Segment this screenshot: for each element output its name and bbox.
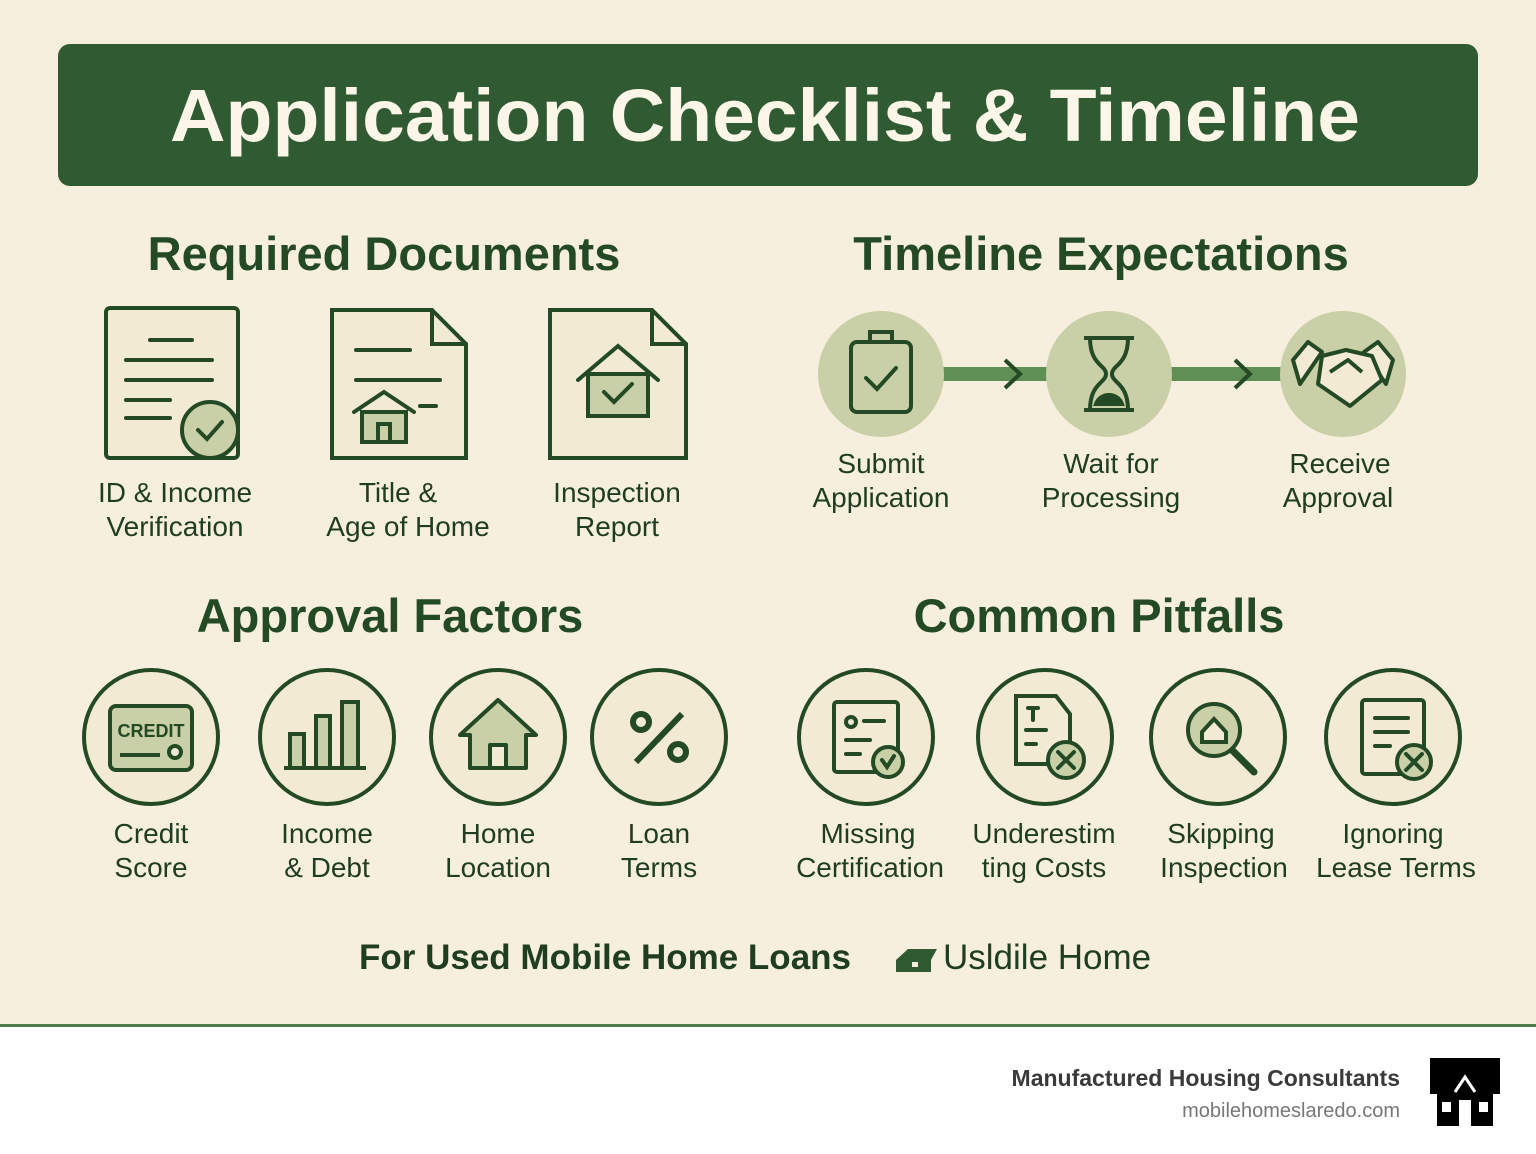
icon: certification bbox=[834, 702, 903, 777]
labels: timeline bbox=[813, 448, 1393, 513]
labels: timeline: Application bbox=[813, 482, 949, 513]
text: Credit bbox=[114, 818, 189, 849]
icon: credit bbox=[110, 706, 192, 770]
text: Lease Terms bbox=[1316, 852, 1476, 883]
labels: timeline: Submit bbox=[837, 448, 925, 479]
icon: percent bbox=[633, 714, 686, 762]
icon: lease bbox=[1362, 700, 1431, 779]
labels: documents: ID & Income bbox=[98, 477, 252, 508]
labels: timeline: Approval bbox=[1283, 482, 1393, 513]
icon: credit: CREDIT bbox=[118, 721, 185, 741]
text: usldile home: Usldile Home bbox=[943, 938, 1151, 977]
labels: timeline: Processing bbox=[1042, 482, 1180, 513]
title banner bbox=[58, 44, 1478, 186]
heading: Approval Factors: Approval Factors bbox=[197, 589, 583, 642]
footer: company: Manufactured Housing Consultants bbox=[1012, 1065, 1400, 1091]
text: & Debt bbox=[284, 852, 370, 883]
labels: documents: Verification bbox=[107, 511, 243, 542]
title banner: Application Checklist & Timeline bbox=[170, 74, 1360, 157]
text: Missing bbox=[821, 818, 915, 849]
text: for used mobile home loans: For Used Mobile Home Loans bbox=[359, 938, 851, 977]
panel: required documents bbox=[106, 308, 686, 458]
text: Income bbox=[281, 818, 373, 849]
labels: documents: Title & bbox=[359, 477, 437, 508]
icon: hourglass bbox=[1046, 311, 1172, 437]
text: Score bbox=[114, 852, 188, 883]
text: ting Costs bbox=[982, 852, 1106, 883]
icon: handshake bbox=[1280, 311, 1406, 437]
icon: bar chart bbox=[284, 702, 366, 768]
panel: pitfalls bbox=[799, 670, 1460, 804]
icon: inspection report bbox=[550, 310, 686, 458]
icon: id document bbox=[106, 308, 238, 458]
labels: documents: Inspection bbox=[553, 477, 681, 508]
text: Home bbox=[461, 818, 535, 849]
text: Certification bbox=[796, 852, 944, 883]
icon: small house bbox=[896, 949, 937, 972]
icon: clipboard bbox=[818, 311, 944, 437]
text: Loan bbox=[628, 818, 690, 849]
footer: company bbox=[1012, 1065, 1400, 1122]
footer: company: mobilehomeslaredo.com bbox=[1182, 1100, 1400, 1122]
text: Underestim bbox=[972, 818, 1116, 849]
text: Terms bbox=[621, 852, 697, 883]
text: Location bbox=[445, 852, 551, 883]
text: Ignoring bbox=[1342, 818, 1444, 849]
arrow: connectors bbox=[940, 360, 1283, 388]
icon: costs document bbox=[1016, 696, 1084, 778]
footer divider bbox=[0, 1024, 1536, 1027]
heading: Required Documents: Required Documents bbox=[148, 227, 620, 280]
heading: Common Pitfalls: Common Pitfalls bbox=[914, 589, 1284, 642]
labels: timeline: Receive bbox=[1289, 448, 1391, 479]
text: Inspection bbox=[1160, 852, 1288, 883]
text: Skipping bbox=[1167, 818, 1275, 849]
labels: documents bbox=[98, 477, 681, 542]
heading: Timeline Expectations: Timeline Expectations bbox=[853, 227, 1349, 280]
labels: documents: Age of Home bbox=[326, 511, 490, 542]
labels: timeline: Wait for bbox=[1063, 448, 1159, 479]
timeline bbox=[813, 311, 1406, 513]
labels: documents: Report bbox=[575, 511, 659, 542]
panel: approval factors bbox=[84, 670, 726, 804]
icon: magnifier bbox=[1188, 704, 1254, 772]
icon: logo bbox=[1430, 1058, 1500, 1126]
icon: title document bbox=[332, 310, 466, 458]
icon: house bbox=[460, 700, 536, 768]
